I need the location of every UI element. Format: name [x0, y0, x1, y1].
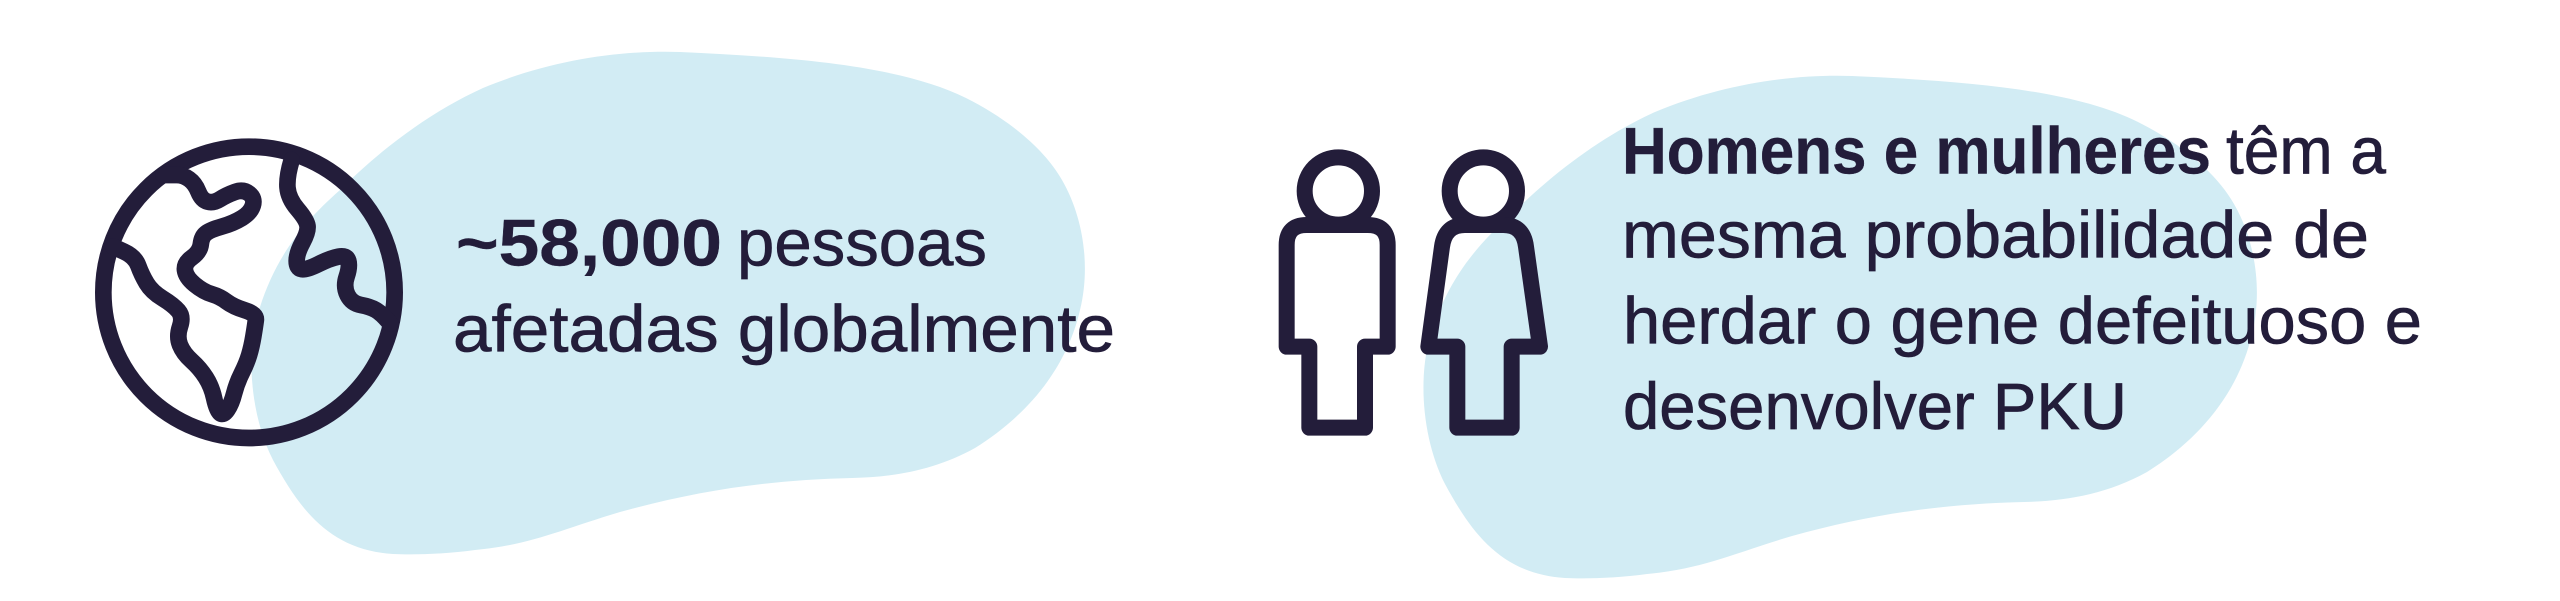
- text: global prevalence: pessoas: [737, 206, 987, 280]
- background blob left: [251, 52, 1085, 554]
- background blob right: [1423, 76, 2257, 578]
- text: equal probability: Homens e mulheres: [1622, 114, 2211, 188]
- text: equal probability: [1622, 114, 2422, 443]
- text: equal probability: mesma probabilidade de: [1622, 198, 2369, 272]
- panel: men and women: [1287, 76, 2422, 578]
- icon: globe: [103, 147, 395, 438]
- text: equal probability: têm a: [2226, 114, 2386, 188]
- text: global prevalence: [453, 206, 1115, 366]
- text: equal probability: desenvolver PKU: [1623, 369, 2127, 443]
- panel: global prevalence: [103, 52, 1115, 554]
- text: equal probability: herdar o gene defeituoso e: [1623, 284, 2422, 358]
- text: global prevalence: afetadas globalmente: [453, 292, 1115, 366]
- text: global prevalence: ~58,000: [456, 206, 722, 280]
- icon: man and woman: [1287, 157, 1540, 428]
